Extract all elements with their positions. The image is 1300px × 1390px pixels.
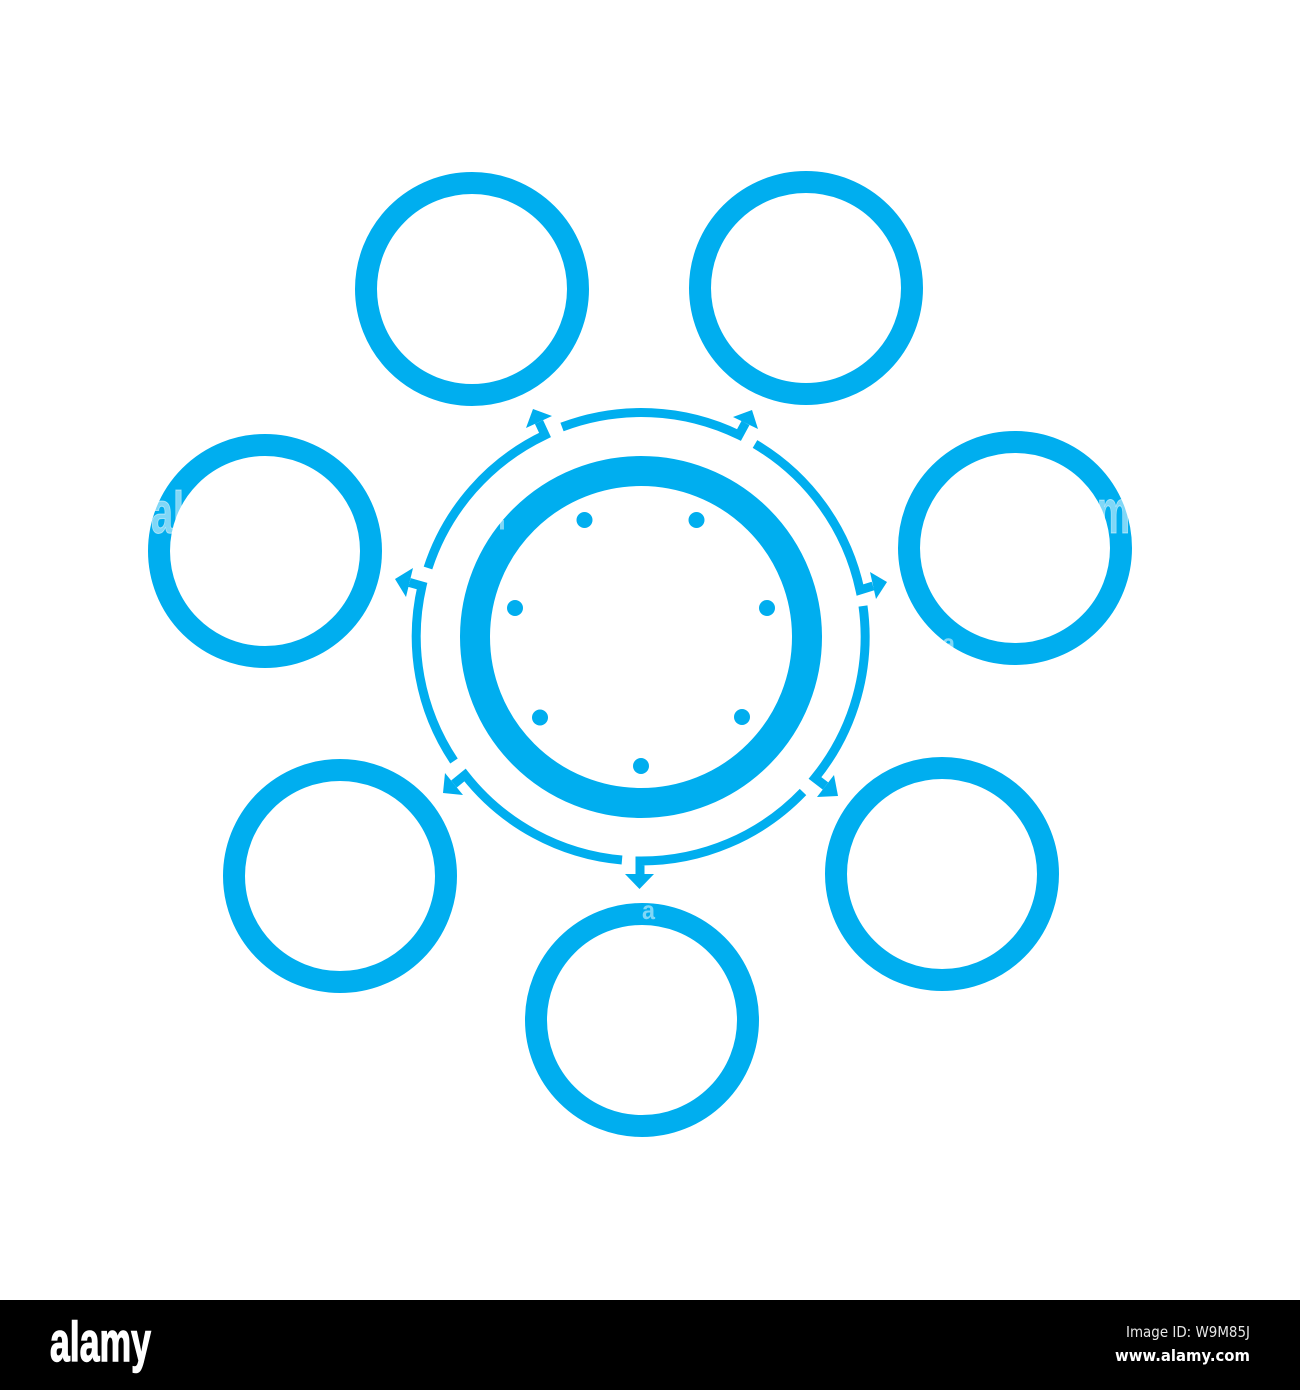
footer band xyxy=(0,1300,1300,1390)
dot 1 xyxy=(576,512,592,528)
dot 3 xyxy=(759,600,775,616)
arrow to bottom circle xyxy=(625,792,803,889)
central ring dots xyxy=(507,512,775,774)
arrow to top right circle xyxy=(562,410,758,435)
watermark: central ring: l xyxy=(498,518,506,532)
arrow to top left circle xyxy=(428,409,552,568)
footer image id: Image ID: W9M85J xyxy=(1126,1323,1250,1341)
segmented arrow ring xyxy=(395,409,887,889)
outer circles xyxy=(159,182,1121,1126)
watermark: bottom: a xyxy=(642,895,655,925)
circle: right xyxy=(909,442,1121,654)
watermark: right: m xyxy=(1097,478,1130,547)
dot 4 xyxy=(734,709,750,725)
arrow to left circle xyxy=(395,568,454,761)
arrow to right circle xyxy=(755,444,887,599)
circle: lower right xyxy=(836,768,1048,980)
circle: lower left xyxy=(234,770,446,982)
arrow to lower left circle xyxy=(443,773,622,860)
watermark: lower right: a xyxy=(942,628,955,658)
circle: top left xyxy=(366,183,578,395)
circle: left xyxy=(159,445,371,657)
dot 5 xyxy=(633,758,649,774)
central ring xyxy=(475,471,807,803)
footer logo: alamy xyxy=(50,1310,151,1373)
circle: top right xyxy=(700,182,912,394)
dot 7 xyxy=(507,600,523,616)
footer url: www.alamy.com xyxy=(1115,1346,1250,1365)
dot 6 xyxy=(532,710,548,726)
circle: bottom xyxy=(536,914,748,1126)
dot 2 xyxy=(688,512,704,528)
watermark fragments xyxy=(151,478,1130,925)
arrow to lower right circle xyxy=(815,606,865,797)
watermark: left: al xyxy=(151,480,184,546)
